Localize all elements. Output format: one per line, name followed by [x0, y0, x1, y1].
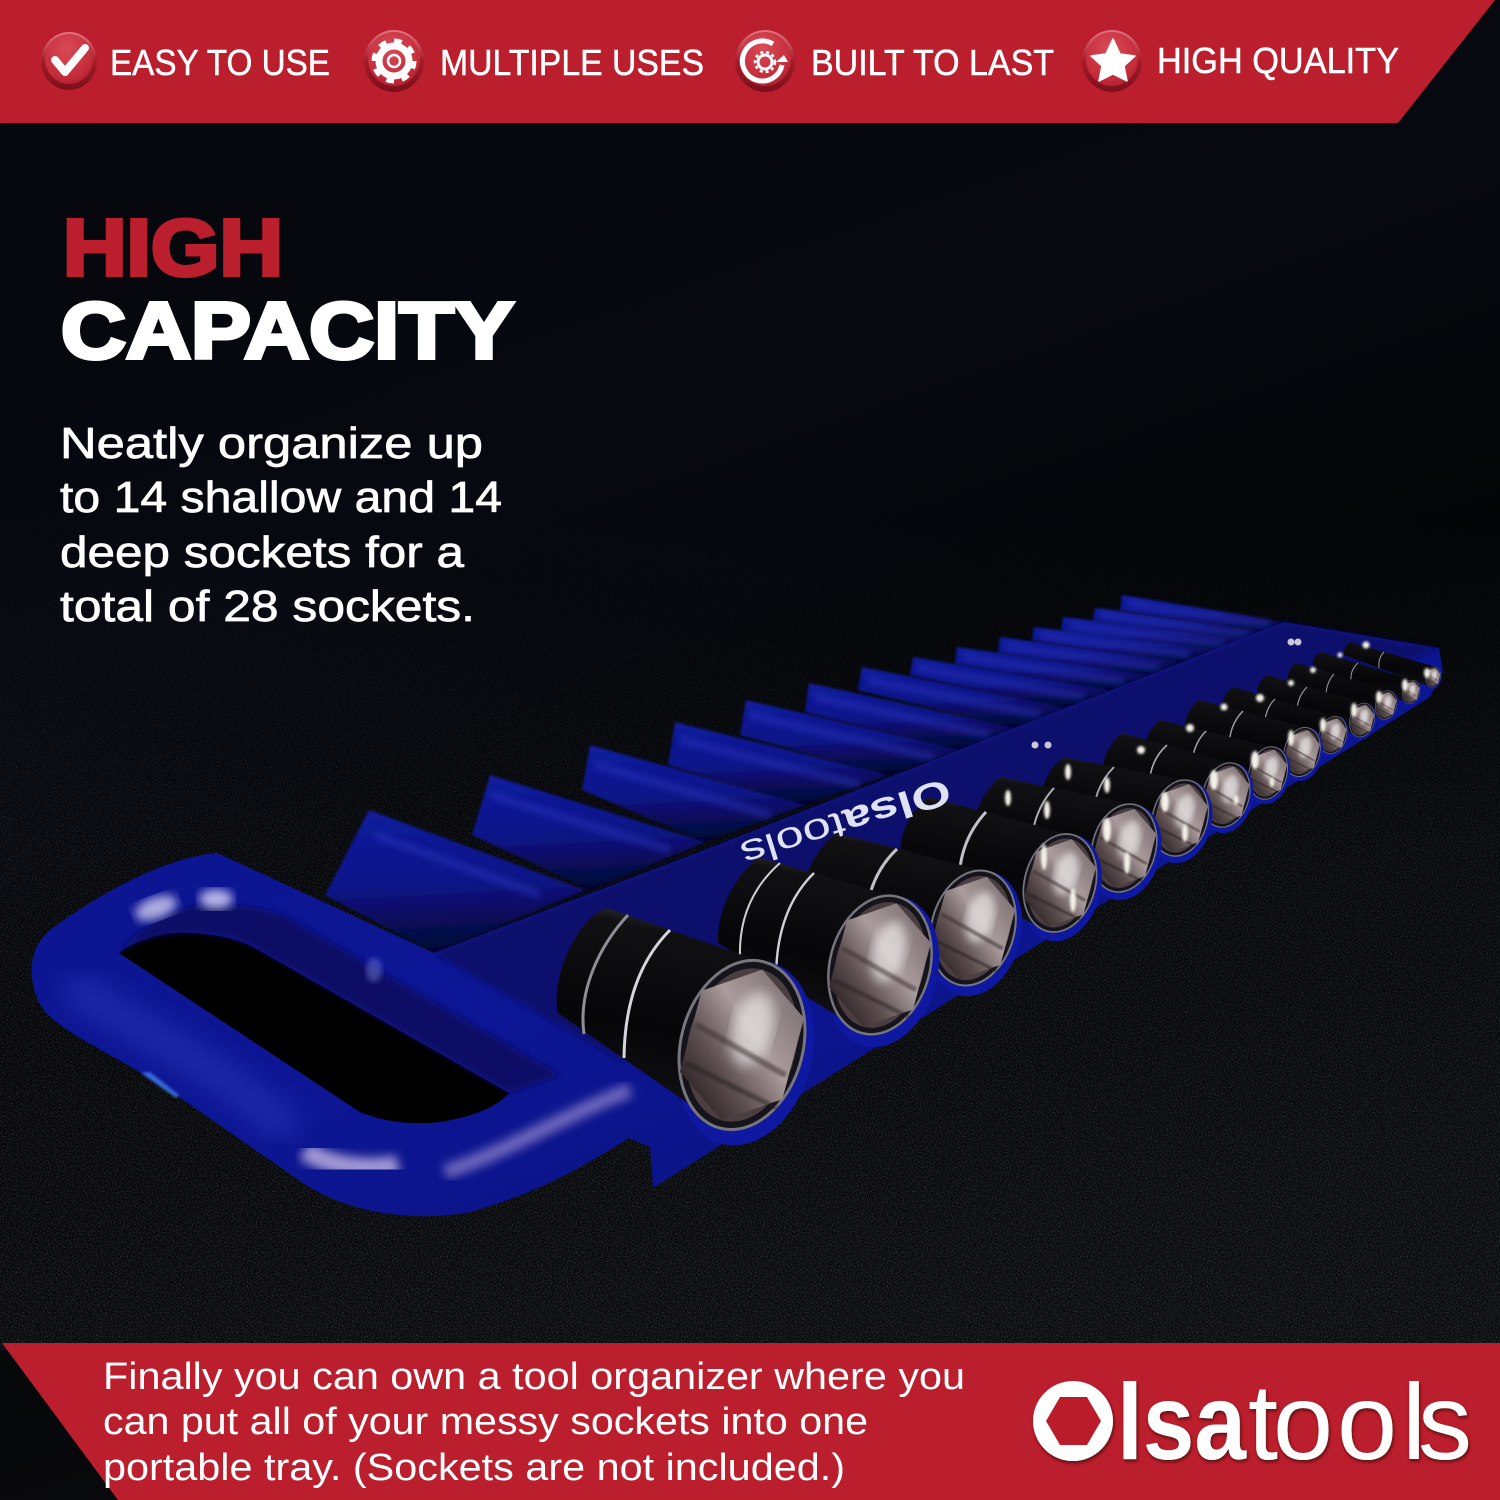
logo: Olsatools: tools	[1248, 1361, 1472, 1482]
handle hole inner wall	[119, 905, 560, 1093]
banner text: portable tray. (Sockets are not included.)	[103, 1447, 845, 1489]
banner text: Finally you can own a tool organizer where you	[103, 1356, 965, 1398]
label: built to last: BUILT TO LAST	[811, 42, 1054, 83]
socket 6	[1041, 757, 1221, 870]
heading line: capacity: CAPACITY	[61, 286, 514, 375]
banner text	[103, 1356, 965, 1489]
socket 7	[1103, 733, 1261, 839]
socket 12	[1288, 663, 1402, 725]
icon: star badge	[1082, 30, 1142, 92]
socket 13	[1313, 652, 1424, 708]
top red banner	[0, 0, 1495, 123]
background: dark cloth	[0, 532, 1500, 1350]
tray edge glint	[141, 1072, 179, 1098]
tine sheen	[375, 603, 1270, 895]
socket 3	[803, 833, 1036, 1007]
logo: Olsatools	[1031, 1361, 1472, 1482]
socket 11	[1257, 675, 1380, 743]
banner text: can put all of your messy sockets into one	[103, 1401, 868, 1443]
tray logo text: Olsatools	[736, 770, 956, 875]
photo: blue socket tray with sockets	[32, 595, 1444, 1216]
heading line: high: HIGH	[63, 203, 283, 292]
socket 1	[557, 908, 834, 1161]
description text: to 14 shallow and 14	[60, 473, 502, 522]
label: multiple uses: MULTIPLE USES	[440, 42, 704, 83]
logo: Olsatools: lsa	[1117, 1361, 1247, 1482]
icon: gear badge	[364, 30, 424, 92]
socket 14	[1344, 642, 1444, 691]
description text: total of 28 sockets.	[60, 582, 475, 631]
tray spine shade	[434, 622, 1439, 1060]
socket 8	[1145, 720, 1297, 809]
logo: Olsatools: O	[1031, 1361, 1115, 1482]
socket 9	[1185, 700, 1329, 786]
socket 5	[975, 777, 1172, 908]
socket 2	[718, 857, 956, 1060]
tray handle and spine	[32, 622, 1443, 1216]
description text	[60, 419, 502, 631]
description text: deep sockets for a	[60, 528, 465, 577]
handle hole	[119, 932, 509, 1123]
chrome highlights on sockets	[1005, 642, 1430, 912]
socket 10	[1222, 687, 1353, 760]
knob on tray	[1032, 638, 1302, 748]
tray tines for deep sockets	[325, 595, 1284, 953]
icon: check badge	[41, 32, 97, 90]
description text: Neatly organize up	[60, 419, 483, 468]
label: high quality: HIGH QUALITY	[1157, 40, 1399, 81]
socket 4	[900, 797, 1113, 950]
heading	[61, 203, 514, 375]
handle highlights	[70, 889, 630, 1172]
bottom red banner	[2, 1343, 1500, 1500]
sockets row	[557, 642, 1444, 1161]
icon: cycle gear badge	[735, 30, 795, 92]
label: easy to use: EASY TO USE	[110, 42, 330, 83]
